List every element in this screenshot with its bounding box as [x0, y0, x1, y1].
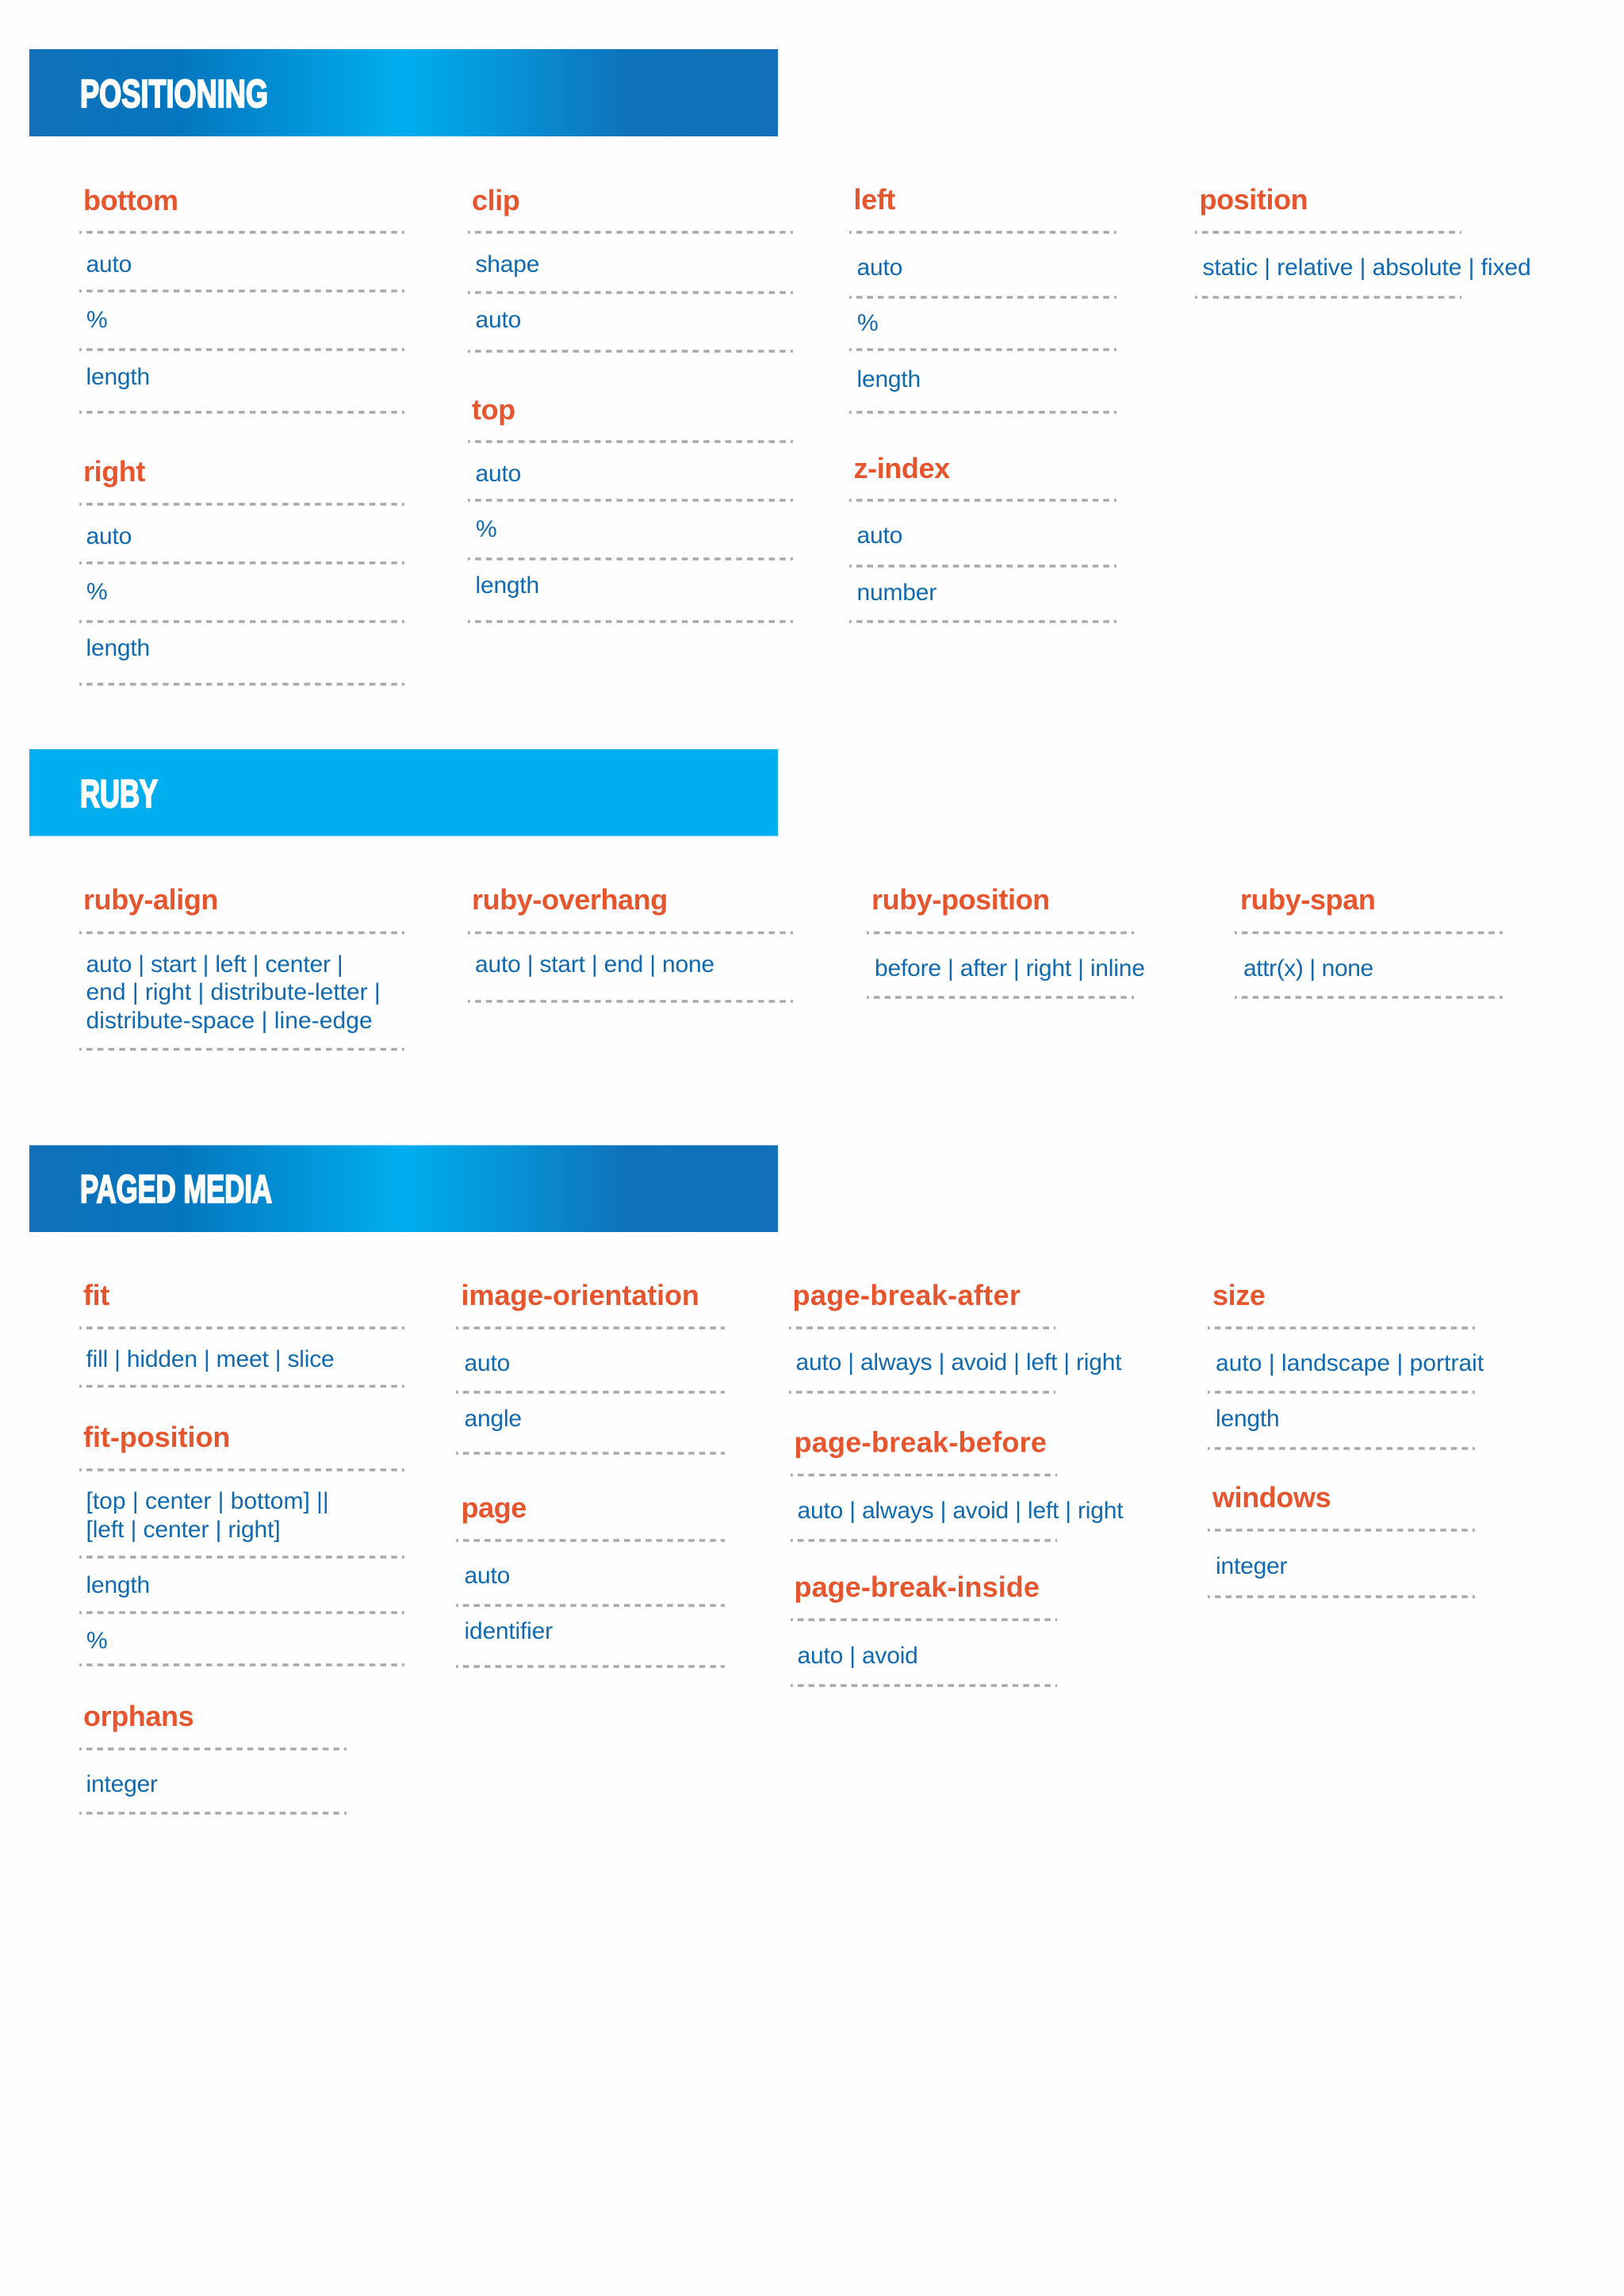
property: ruby-span: ruby-span	[1240, 883, 1375, 916]
property: size	[1208, 1279, 1484, 1448]
property: z-index: z-index	[853, 452, 950, 484]
property: windows: windows	[1212, 1481, 1331, 1513]
banner: positioning: POSITIONING	[80, 73, 268, 116]
property: ruby-align: distribute-space | line-edge	[86, 1008, 373, 1034]
property: ruby-position: before | after | right | inline	[875, 955, 1145, 982]
property: orphans	[79, 1700, 347, 1813]
property: left: %	[857, 310, 878, 336]
banner: paged media	[29, 1145, 778, 1232]
panel: ruby section	[29, 749, 1503, 1050]
property: top: %	[476, 516, 496, 542]
property: ruby-span: attr(x) | none	[1243, 955, 1373, 982]
property: image-orientation: auto	[465, 1350, 510, 1376]
property: bottom: auto	[86, 251, 132, 277]
property: ruby-span	[1235, 883, 1503, 997]
property: clip: auto	[476, 307, 521, 333]
property: position: position	[1199, 183, 1308, 216]
property: page-break-inside: auto | avoid	[798, 1643, 918, 1669]
property: top	[468, 393, 793, 622]
property: ruby-overhang	[468, 883, 793, 1001]
property: page-break-after: auto | always | avoid | left | right	[796, 1349, 1122, 1376]
banner: paged media: PAGED MEDIA	[80, 1169, 272, 1211]
banner: ruby: RUBY	[80, 773, 158, 816]
property: fit: fit	[83, 1279, 109, 1311]
property: page-break-before	[791, 1425, 1124, 1540]
property: left: auto	[856, 254, 902, 281]
property: fit-position	[79, 1421, 404, 1665]
property: bottom: %	[86, 307, 107, 333]
property: size: length	[1216, 1406, 1280, 1432]
property: page-break-inside: page-break-inside	[795, 1571, 1039, 1603]
property: left	[849, 183, 1116, 412]
property: top: top	[472, 393, 515, 426]
property: fit-position: %	[86, 1628, 107, 1654]
property: clip: shape	[476, 251, 539, 277]
property: orphans: orphans	[83, 1700, 193, 1732]
panel: positioning section	[29, 49, 1530, 684]
property: bottom: length	[86, 364, 150, 390]
property: page	[456, 1491, 725, 1667]
property: fit: fill | hidden | meet | slice	[86, 1346, 335, 1372]
property: fit-position: length	[86, 1572, 150, 1598]
property: ruby-align	[79, 883, 404, 1050]
property: windows: integer	[1216, 1553, 1288, 1579]
property: bottom	[79, 184, 404, 412]
property: windows	[1208, 1481, 1475, 1597]
property: image-orientation	[456, 1279, 725, 1453]
property: ruby-align: ruby-align	[83, 883, 218, 916]
property: orphans: integer	[86, 1771, 158, 1797]
property: image-orientation: angle	[465, 1406, 522, 1432]
property: ruby-overhang: ruby-overhang	[472, 883, 668, 916]
property: page: auto	[465, 1563, 510, 1589]
property: clip	[468, 184, 793, 351]
property: ruby-position: ruby-position	[871, 883, 1050, 916]
property: page-break-before: page-break-before	[795, 1425, 1047, 1459]
property: fit-position: [top | center | bottom] ||	[86, 1488, 328, 1514]
property: left: length	[856, 366, 921, 392]
property: page-break-after	[789, 1279, 1122, 1392]
property: size: auto | landscape | portrait	[1216, 1350, 1484, 1376]
property: right: auto	[86, 523, 132, 549]
banner: ruby	[29, 749, 778, 836]
property: top: length	[476, 572, 539, 599]
property: fit-position: fit-position	[83, 1421, 230, 1453]
property: ruby-overhang: auto | start | end | none	[475, 951, 714, 978]
property: position	[1195, 183, 1530, 297]
property: right: %	[86, 579, 107, 605]
banner: positioning	[29, 49, 778, 136]
property: bottom: bottom	[83, 184, 178, 216]
property: top: auto	[476, 461, 521, 487]
property: ruby-align: auto | start | left | center |	[86, 951, 343, 978]
property: z-index	[849, 452, 1116, 622]
property: ruby-align: end | right | distribute-letter |	[86, 979, 381, 1005]
property: page-break-inside	[791, 1571, 1057, 1686]
property: size: size	[1212, 1279, 1265, 1311]
property: fit-position: [left | center | right]	[86, 1517, 281, 1543]
property: page: page	[462, 1491, 527, 1524]
property: ruby-position	[867, 883, 1145, 997]
property: fit	[79, 1279, 404, 1386]
property: image-orientation: image-orientation	[462, 1279, 699, 1311]
property: right: length	[86, 635, 150, 661]
property: page: identifier	[465, 1618, 553, 1644]
panel: paged media section	[29, 1145, 1484, 1813]
property: clip: clip	[472, 184, 519, 216]
property: right: right	[83, 455, 145, 488]
property: z-index: number	[856, 580, 936, 606]
property: page-break-after: page-break-after	[793, 1279, 1021, 1311]
property: right	[79, 455, 404, 684]
property: position: static | relative | absolute | fixed	[1202, 254, 1530, 281]
property: z-index: auto	[856, 522, 902, 549]
property: page-break-before: auto | always | avoid | left | right	[798, 1498, 1124, 1524]
property: left: left	[853, 183, 895, 216]
